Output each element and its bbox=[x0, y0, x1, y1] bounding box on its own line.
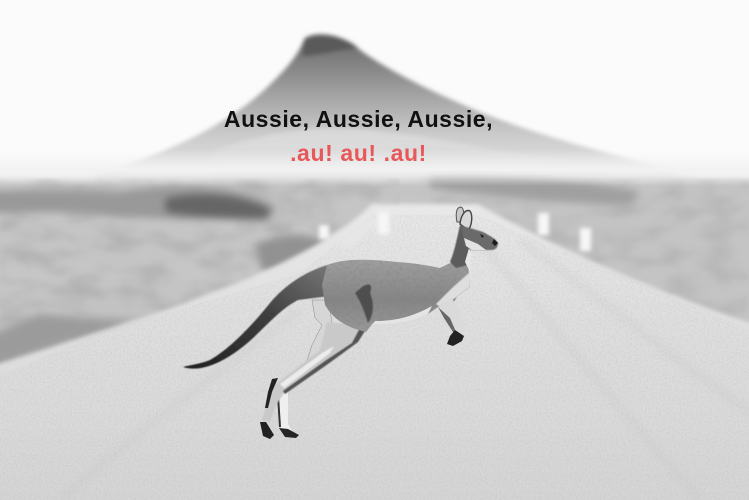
left field bbox=[0, 178, 480, 378]
dark hock bbox=[265, 378, 278, 408]
far foot bbox=[279, 428, 299, 438]
neck bbox=[450, 225, 472, 268]
right field bbox=[420, 175, 749, 328]
chest highlight bbox=[436, 272, 470, 307]
heading: Aussie, Aussie, Aussie, bbox=[224, 106, 493, 132]
haunch shadow bbox=[355, 285, 373, 323]
eye and nose bbox=[480, 234, 498, 246]
road grain bbox=[0, 215, 749, 500]
field texture bbox=[0, 178, 400, 368]
foreleg bbox=[438, 298, 466, 338]
head bbox=[461, 226, 498, 250]
far shin bbox=[277, 392, 292, 431]
kangaroo bbox=[183, 207, 498, 439]
road markers bbox=[319, 212, 591, 251]
near leg highlight bbox=[280, 346, 334, 388]
near hind leg bbox=[262, 322, 368, 422]
tail bbox=[183, 265, 330, 369]
ear back bbox=[456, 207, 464, 222]
road lane streaks bbox=[60, 230, 749, 500]
mountain bbox=[95, 34, 700, 190]
road bbox=[0, 204, 749, 500]
torso bbox=[322, 260, 470, 332]
subheading: .au! au! .au! bbox=[290, 140, 427, 166]
far hind leg bbox=[304, 300, 332, 370]
leg shadow bbox=[283, 326, 368, 394]
paw bbox=[447, 330, 464, 346]
near foot bbox=[260, 422, 274, 439]
haze band bbox=[0, 150, 749, 186]
ear front bbox=[460, 211, 472, 230]
belly light bbox=[373, 306, 432, 324]
field texture right bbox=[430, 178, 749, 318]
